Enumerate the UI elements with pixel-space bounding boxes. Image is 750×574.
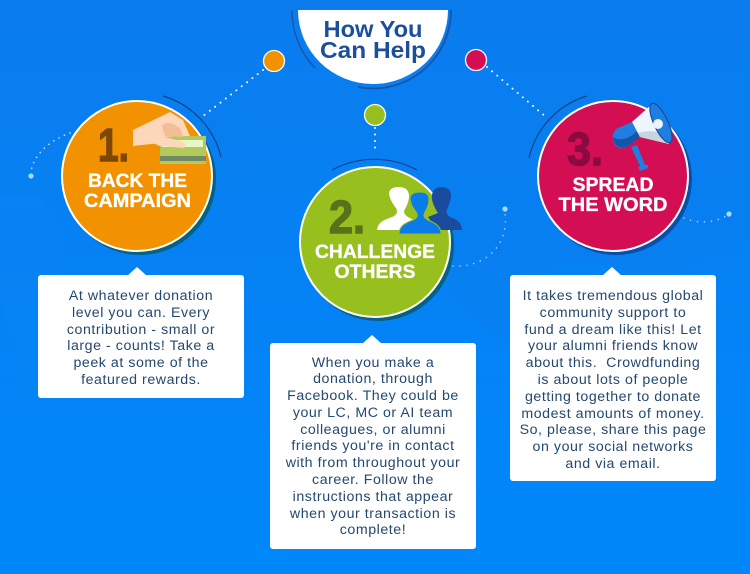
node dot: crimson xyxy=(466,50,486,70)
node dot: orange xyxy=(264,50,284,72)
number 1: 1. xyxy=(98,119,129,171)
icon: three people xyxy=(377,187,462,234)
text block: spread the word: fund a dream like this! Let xyxy=(524,322,702,338)
text block: spread the word xyxy=(510,275,716,481)
panel: challenge others circle xyxy=(300,159,462,321)
text block: spread the word: about this. Crowdfunding xyxy=(526,355,700,371)
callout pointers xyxy=(127,267,622,344)
text block: back the campaign: At whatever donation xyxy=(69,288,213,304)
title: How You xyxy=(324,16,422,42)
text block: spread the word: It takes tremendous global xyxy=(523,288,703,304)
text block: spread the word: your alumni friends know xyxy=(528,338,698,354)
text block: back the campaign xyxy=(38,275,244,398)
panel: back the campaign circle: CAMPAIGN xyxy=(84,191,191,212)
text block: challenge others: complete! xyxy=(340,522,406,538)
text block: back the campaign: level you can. Every xyxy=(72,305,210,321)
number 3: 3. xyxy=(567,123,603,175)
text block: challenge others: colleagues, or alumni xyxy=(300,422,446,438)
glowing endpoint dots xyxy=(28,173,732,217)
text block: challenge others: instructions that appear xyxy=(293,489,453,505)
text block: back the campaign: large - counts! Take a xyxy=(67,338,215,354)
node dot: green xyxy=(364,104,386,126)
icon: hand holding cash xyxy=(133,112,206,164)
dotted connectors xyxy=(31,67,726,266)
text block: spread the word: getting together to donate xyxy=(525,389,701,405)
number 2: 2. xyxy=(329,191,365,243)
panel: spread the word circle: THE WORD xyxy=(558,195,668,216)
label: CHALLENGE xyxy=(315,242,435,263)
text block: spread the word: is about lots of people xyxy=(538,372,688,388)
text block: back the campaign: featured rewards. xyxy=(81,372,201,388)
panel: challenge others circle: OTHERS xyxy=(334,262,416,283)
header badge: Can Help xyxy=(320,37,426,63)
text block: spread the word: on your social networks xyxy=(533,439,693,455)
text block: challenge others: career. Follow the xyxy=(312,472,434,488)
text block: challenge others: Facebook. They could be xyxy=(287,388,459,404)
text block: challenge others xyxy=(270,343,476,549)
text block: challenge others: when your transaction is xyxy=(290,506,456,522)
text block: challenge others: friends you're in contact xyxy=(291,438,455,454)
text block: spread the word: and via email. xyxy=(565,456,661,472)
text block: spread the word: community support to xyxy=(540,305,686,321)
text block: challenge others: your LC, MC or AI team xyxy=(293,405,453,421)
label: SPREAD xyxy=(572,175,654,196)
text block: challenge others: When you make a xyxy=(312,354,434,370)
text block: spread the word: modest amounts of money. xyxy=(521,406,705,422)
text block: spread the word: So, please, share this page xyxy=(520,422,706,438)
panel: back the campaign circle xyxy=(62,96,221,255)
text block: challenge others: donation, through xyxy=(313,371,433,387)
label: BACK THE xyxy=(88,171,187,192)
icon: megaphone xyxy=(613,101,676,171)
header badge xyxy=(292,10,451,88)
text block: back the campaign: peek at some of the xyxy=(73,355,209,371)
panel: spread the word circle xyxy=(529,96,692,255)
text block: back the campaign: contribution - small or xyxy=(67,322,215,338)
text block: challenge others: with from throughout your xyxy=(286,455,460,471)
